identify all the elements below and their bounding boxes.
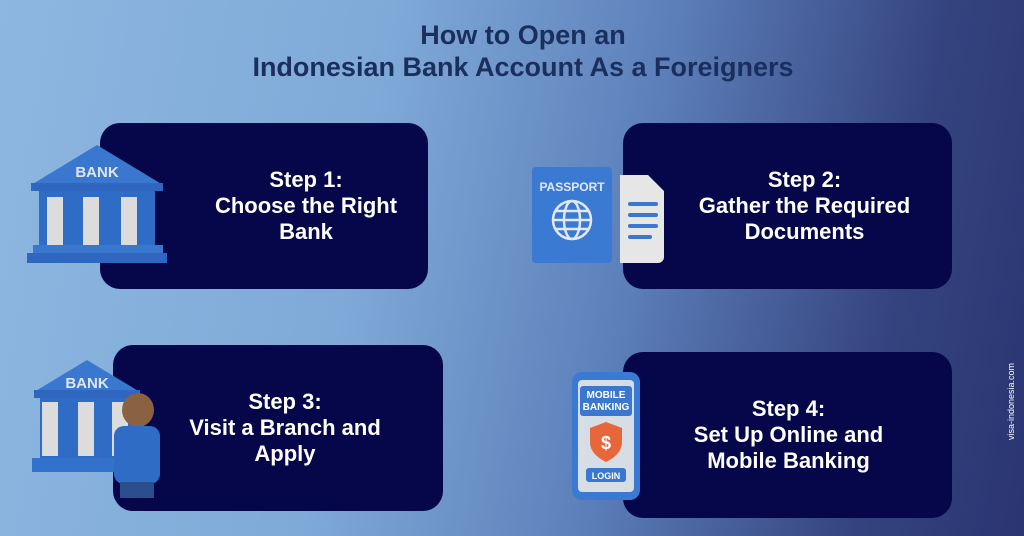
panel: step 2: Step 2:	[768, 167, 841, 192]
watermark: visa-indonesia.com	[1006, 363, 1016, 440]
panel: step 1	[100, 123, 428, 289]
panel: step 3: Step 3:	[248, 389, 322, 414]
panel: step 1: Bank	[279, 219, 333, 244]
panel: step 2: Documents	[745, 219, 864, 244]
icon: mobile banking phone	[572, 372, 640, 500]
icon: mobile banking phone: LOGIN	[592, 471, 620, 481]
panel: step 1: Choose the Right	[215, 193, 397, 218]
panel: step 4	[623, 352, 952, 518]
icon: mobile banking phone: $	[601, 433, 611, 453]
icon: bank	[27, 145, 167, 263]
icon: mobile banking phone: MOBILE	[587, 390, 626, 401]
panel: step 4: Step 4:	[752, 396, 825, 421]
icon: bank with person: BANK	[65, 375, 109, 392]
title	[252, 20, 794, 82]
panel: step 3: Apply	[254, 441, 316, 466]
title: How to Open an	[420, 20, 626, 50]
panel: step 3	[113, 345, 443, 511]
panel: step 3: Visit a Branch and	[189, 415, 381, 440]
icon: passport and document	[532, 167, 664, 263]
panel: step 4: Set Up Online and	[694, 422, 883, 447]
panel: step 1: Step 1:	[269, 167, 343, 192]
panel: step 2: Gather the Required	[699, 193, 910, 218]
title: Indonesian Bank Account As a Foreigners	[252, 52, 794, 82]
icon: bank: BANK	[75, 164, 119, 181]
icon: passport and document: PASSPORT	[539, 180, 605, 194]
panel: step 2	[623, 123, 952, 289]
panel: step 4: Mobile Banking	[707, 448, 870, 473]
icon: bank with person	[32, 360, 160, 498]
icon: mobile banking phone: BANKING	[583, 402, 630, 413]
